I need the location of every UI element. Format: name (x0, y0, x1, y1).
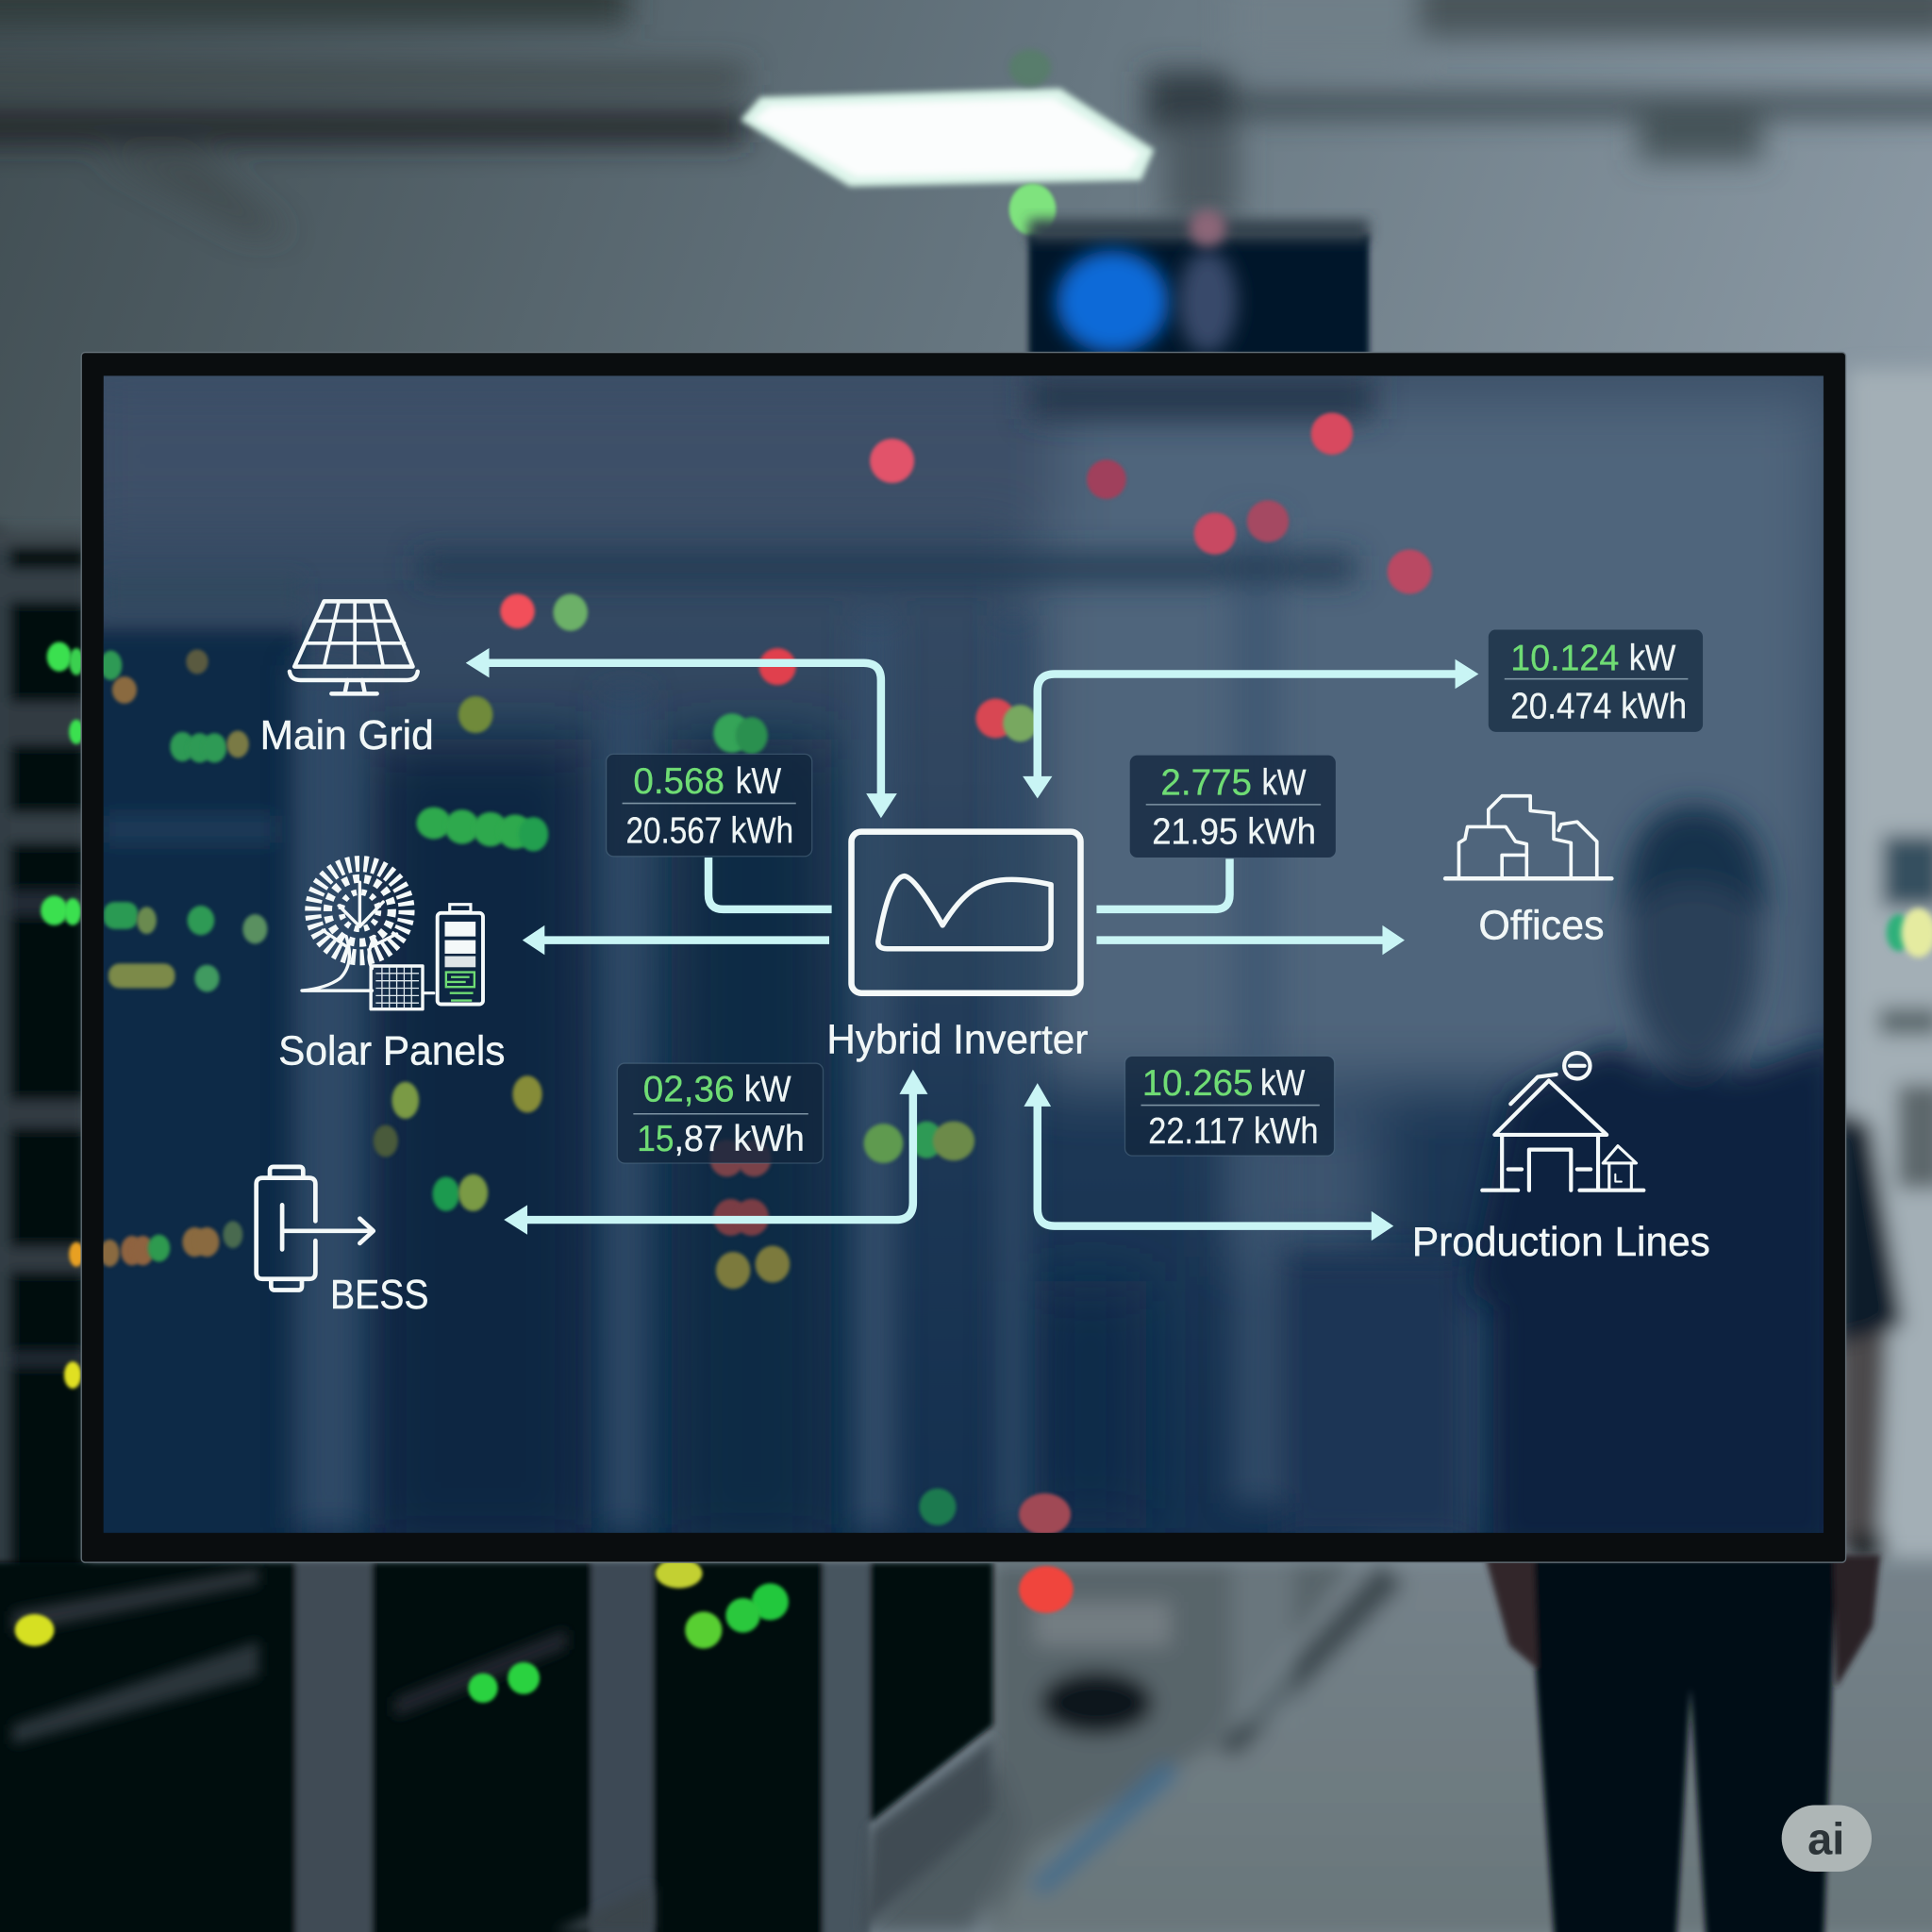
label: BESS: BESS (330, 1273, 429, 1318)
lights outside screen (15, 641, 1932, 1703)
meter: upper right: 20.474 kWh (1510, 686, 1687, 726)
meter: hybrid inverter right: 21.95 kWh (1152, 812, 1316, 853)
arrow: BESS to inverter (504, 1070, 928, 1235)
meter: BESS: 15 (637, 1119, 674, 1159)
arrow: main grid to inverter (466, 648, 897, 818)
monitor frame (81, 353, 1846, 1562)
meter: BESS (617, 1063, 823, 1163)
icon: offices (1445, 796, 1611, 878)
floor and aisle (862, 1558, 1932, 1932)
meter: hybrid inverter right: 2.775 (1160, 762, 1252, 803)
icon: hybrid inverter (852, 832, 1080, 993)
icon: BESS battery (257, 1167, 374, 1291)
arrow: inverter to production lines (1024, 1083, 1393, 1241)
label: Main Grid: Main Grid (260, 713, 434, 758)
meter: upper right (1489, 629, 1703, 732)
label: Hybrid Inverter: Hybrid Inverter (826, 1018, 1088, 1063)
right wall equipment (1836, 370, 1932, 1602)
meter: hybrid inverter right (1130, 756, 1336, 858)
meter: production lines: 22.117 kWh (1148, 1111, 1319, 1152)
meter: main grid: 20.567 kWh (626, 810, 793, 851)
wall monitor (1029, 209, 1369, 358)
bokeh indicator lights (100, 413, 1432, 1535)
meter: BESS: 02,36 (643, 1070, 734, 1110)
lower racks (0, 1562, 993, 1932)
meter: production lines (1124, 1056, 1335, 1156)
arrow: inverter to upper right meter (1023, 659, 1478, 798)
meter: BESS: ,87 kWh (674, 1119, 805, 1159)
meter: main grid: kW (736, 761, 781, 802)
meter: hybrid inverter right: kW (1261, 762, 1307, 803)
meter: main grid: 0.568 (633, 761, 724, 802)
meter: BESS: kW (744, 1070, 791, 1110)
badge: ai watermark: ai (1807, 1814, 1844, 1864)
screen background (74, 375, 1836, 1565)
ceiling light (743, 49, 1152, 235)
left server rack (0, 524, 86, 1590)
meter: production lines: 10.265 (1142, 1063, 1253, 1104)
icon: solar panels tree and battery (302, 864, 483, 1009)
meter: upper right: 10.124 (1510, 639, 1619, 679)
arrow: inverter to offices (1096, 925, 1405, 955)
label: Production Lines: Production Lines (1412, 1220, 1710, 1265)
meter: upper right: kW (1629, 639, 1675, 679)
meter: production lines: kW (1260, 1063, 1305, 1104)
meter: main grid (607, 754, 812, 857)
person silhouette lower body (1485, 1555, 1880, 1932)
person reflected in screen (1470, 806, 1836, 1553)
icon: main grid solar panel (290, 601, 418, 693)
connector: left meter to inverter (708, 858, 832, 909)
label: Offices: Offices (1478, 903, 1605, 948)
label: Solar Panels: Solar Panels (278, 1028, 506, 1074)
icon: production lines factory house (1482, 1053, 1643, 1191)
connector: right meter to inverter (1096, 858, 1230, 909)
arrow: inverter to solar panels (523, 925, 829, 955)
badge: ai watermark (1782, 1805, 1872, 1872)
